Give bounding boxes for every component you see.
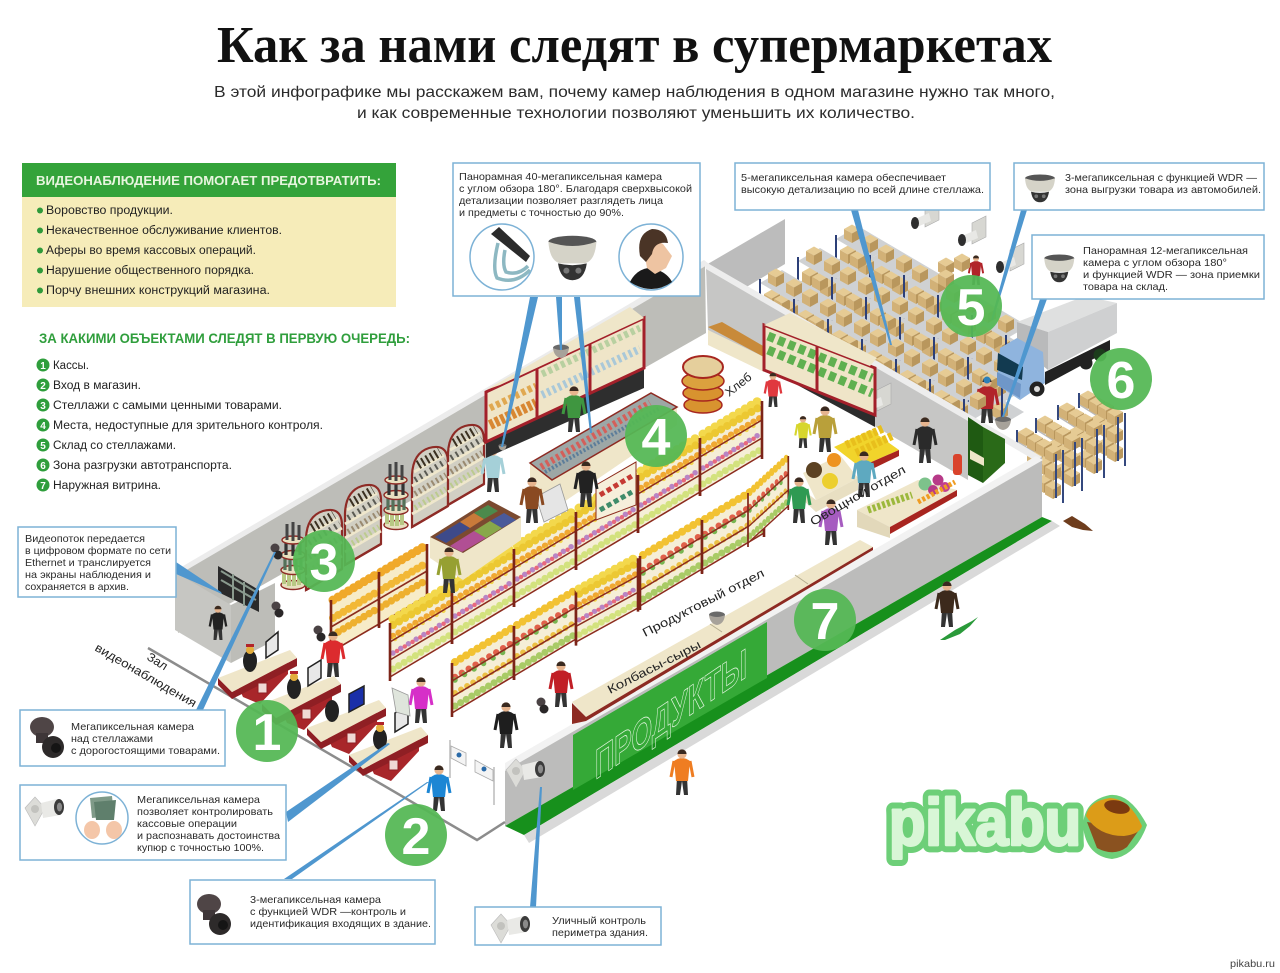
shopping cart — [392, 688, 410, 716]
number 7: 7 — [811, 593, 839, 651]
callout: entrance camera: с функцией WDR —контроль и — [250, 906, 406, 918]
vegetable cooler — [764, 313, 877, 427]
priority items: Места, недоступные для зрительного контроля. — [53, 420, 323, 432]
icon: mushroom camera — [30, 717, 64, 758]
front inner counter — [572, 540, 873, 724]
callout: video stream: Ethernet и транслируется — [25, 557, 151, 569]
logo wordmark: pikabu — [889, 785, 1081, 859]
cashiers — [243, 650, 387, 750]
number 1: 1 — [253, 704, 281, 762]
back wall of store — [178, 260, 709, 633]
prevention items: Воровство продукции. — [46, 205, 173, 217]
monitor wall — [218, 566, 259, 612]
store sign — [573, 622, 767, 790]
priority number markers — [36, 358, 50, 492]
department labels: Колбасы-сыры — [605, 637, 703, 697]
callout: 5 megapixel camera: 5-мегапиксельная камера обеспечивает — [741, 172, 946, 184]
warehouse racks — [760, 224, 1028, 447]
department labels: Хлеб — [722, 370, 755, 399]
number 3 — [293, 530, 355, 592]
sign lettering: ПРОДУКТЫ — [595, 639, 747, 789]
outside shoppers — [671, 581, 958, 795]
store shelves: long row one — [390, 400, 762, 681]
customers at fruit — [788, 451, 875, 545]
store shelves: long row two — [452, 456, 788, 717]
callout: camera above shelves: Мегапиксельная камера — [71, 721, 194, 733]
priority heading: ЗА КАКИМИ ОБЪЕКТАМИ СЛЕДЯТ В ПЕРВУЮ ОЧЕРЕДЬ: — [39, 331, 410, 346]
callout: outdoor perimeter: Уличный контроль — [552, 915, 647, 927]
truck cargo box — [1017, 296, 1117, 332]
icon: banknotes in circle — [76, 792, 128, 844]
callout: 12 megapixel camera: Панорамная 12-мегапиксельная — [1083, 245, 1248, 257]
department labels — [605, 370, 908, 697]
callout: video stream: Видеопоток передается — [25, 533, 145, 545]
number 5: 5 — [957, 279, 985, 337]
monitors — [266, 632, 278, 658]
icon: dome — [1044, 254, 1074, 282]
bottle arches — [281, 425, 484, 590]
truck wheels — [1030, 382, 1044, 396]
shopper with cart — [521, 477, 568, 523]
callout: cash control camera: Мегапиксельная камера — [137, 794, 260, 806]
prevention items: Порчу внешних конструкций магазина. — [46, 285, 270, 297]
callout: cash control camera: купюр с точностью 100%. — [137, 842, 264, 854]
callout: outdoor perimeter: периметра здания. — [552, 927, 648, 939]
prevention heading: ВИДЕОНАБЛЮДЕНИЕ ПОМОГАЕТ ПРЕДОТВРАТИТЬ: — [36, 173, 381, 188]
priority number markers: 3 — [40, 401, 46, 412]
warehouse door — [968, 417, 1005, 483]
surveillance room floor line — [148, 648, 505, 840]
callout: video stream — [18, 527, 176, 597]
callout: 12 megapixel camera: камера с углом обзора 180° — [1083, 257, 1227, 269]
callout: 12 megapixel camera: товара на склад. — [1083, 281, 1168, 293]
truck — [997, 296, 1117, 400]
callout: 3 megapixel WDR camera: 3-мегапиксельная с функцией WDR — — [1065, 172, 1257, 184]
prevention items: Аферы во время кассовых операций. — [46, 245, 256, 257]
title: Как за нами следят в супермаркетах — [217, 17, 1052, 74]
number 6: 6 — [1107, 352, 1135, 410]
outdoor rack by zone 6 — [1017, 390, 1125, 503]
customers near vegetable cooler — [765, 373, 836, 452]
department labels: Овощной отдел — [808, 462, 908, 529]
callout: video stream: сохраняется в архив. — [25, 581, 129, 593]
number 6 — [1090, 348, 1152, 410]
icon: bottle in circle — [470, 224, 534, 290]
callout: cash control camera: и распознавать достоинства — [137, 830, 280, 842]
number 5 — [940, 275, 1002, 337]
callout: 12 megapixel camera — [1032, 235, 1264, 299]
shop assistant — [575, 461, 597, 507]
callout: video stream: на экраны наблюдения и — [25, 569, 151, 581]
cooler with pastries — [486, 307, 644, 458]
callout: cash control camera: позволяет контролировать — [137, 806, 274, 818]
woman at cooler — [563, 386, 585, 432]
worker with box — [970, 376, 998, 423]
brown animal — [1063, 516, 1093, 531]
logo wordmark: pikabu — [889, 785, 1081, 859]
clothes island — [430, 500, 521, 580]
panel: priority objects — [36, 331, 410, 492]
number 4 — [625, 405, 687, 467]
subtitle — [214, 84, 1055, 122]
truck cab — [997, 338, 1045, 400]
olive shopper — [438, 547, 460, 593]
partition wall cameras — [808, 339, 891, 413]
priority items: Зона разгрузки автотранспорта. — [53, 460, 232, 472]
fruit stands — [803, 428, 957, 538]
crocodile toy — [940, 617, 978, 640]
truck chassis — [1045, 340, 1110, 385]
number 1 — [236, 700, 298, 762]
callout: entrance camera — [190, 880, 435, 944]
number 2 — [385, 804, 447, 866]
prevention items: Некачественное обслуживание клиентов. — [46, 225, 282, 237]
turnstiles — [450, 740, 494, 805]
fish counter — [530, 393, 677, 510]
icon: bullet camera — [25, 797, 64, 826]
small cameras in store — [270, 344, 1011, 714]
banana stand — [834, 430, 899, 467]
department labels: Продуктовый отдел — [640, 566, 767, 640]
prevention bullets — [37, 208, 43, 294]
warehouse worker — [969, 255, 983, 285]
icon: face in circle — [619, 224, 683, 290]
priority number markers: 7 — [40, 481, 46, 492]
callout: 3 megapixel WDR camera: зона выгрузки товара из автомобилей. — [1065, 184, 1261, 196]
priority number markers: 2 — [40, 381, 46, 392]
curb — [524, 521, 1060, 843]
subtitle: В этой инфографике мы расскажем вам, почему камер наблюдения в одном магазине нужно так много, — [214, 84, 1055, 101]
callout: entrance camera: 3-мегапиксельная камера — [250, 894, 381, 906]
callout: 40 megapixel camera: Панорамная 40-мегапиксельная камера — [459, 171, 662, 183]
plates display — [596, 462, 636, 520]
icon: bullet camera — [491, 914, 530, 943]
blue leader lines — [176, 210, 1047, 907]
number 3: 3 — [310, 534, 338, 592]
icon: dome camera — [548, 236, 596, 280]
subtitle: и как современные технологии позволяют уменьшить их количество. — [357, 105, 915, 122]
shoppers front hall — [322, 631, 572, 811]
boxes carried by worker — [938, 254, 970, 288]
front outer wall — [505, 456, 1060, 843]
callout: outdoor perimeter — [475, 907, 661, 945]
callout: 40 megapixel camera — [453, 163, 700, 296]
number 4: 4 — [642, 409, 671, 467]
security guard — [914, 417, 936, 463]
priority items: Наружная витрина. — [53, 480, 161, 492]
callout: video stream: в цифровом формате по сети — [25, 545, 171, 557]
ground strip — [505, 517, 1052, 835]
priority number markers: 6 — [40, 461, 46, 472]
store shelves: oranges by zone 3 — [331, 544, 427, 656]
pikabu logo — [889, 785, 1147, 859]
prevention items: Нарушение общественного порядка. — [46, 265, 254, 277]
priority number markers: 4 — [40, 421, 46, 432]
priority items — [53, 360, 323, 492]
icon: mushroom camera — [197, 894, 231, 935]
priority items: Кассы. — [53, 360, 89, 372]
checkout counters — [218, 632, 428, 781]
surveillance room label: Зал — [144, 650, 170, 673]
bread rack — [682, 356, 724, 413]
priority items: Стеллажи с самыми ценными товарами. — [53, 400, 282, 412]
bread counter — [708, 322, 770, 372]
wall-mounted warehouse cameras — [911, 199, 1024, 273]
operator — [210, 606, 226, 640]
callout: 40 megapixel camera: и предметы с точностью до 90%. — [459, 207, 624, 219]
callout: 12 megapixel camera: и функцией WDR — зона приемки — [1083, 269, 1260, 281]
surveillance room label: видеонаблюдения — [92, 640, 199, 710]
callout: 40 megapixel camera: детализации позволяет разглядеть лица — [459, 195, 663, 207]
monitoring room — [175, 566, 275, 663]
partition wall — [704, 261, 1042, 480]
callout: camera above shelves — [20, 710, 225, 766]
outdoor bullet camera — [506, 759, 545, 788]
callout: 5 megapixel camera — [735, 163, 990, 210]
panel: prevention list — [22, 163, 396, 307]
callout: camera above shelves: над стеллажами — [71, 733, 153, 745]
priority items: Склад со стеллажами. — [53, 440, 176, 452]
warehouse back wall — [706, 219, 785, 310]
number markers — [236, 275, 1152, 866]
callout: camera above shelves: с дорогостоящими товарами. — [71, 745, 220, 757]
callout: cash control camera: кассовые операции — [137, 818, 237, 830]
callout: 5 megapixel camera: высокую детализацию по всей длине стеллажа. — [741, 184, 984, 196]
callout: 3 megapixel WDR camera — [1014, 163, 1264, 210]
watermark: pikabu.ru — [1230, 958, 1275, 970]
callout: cash control camera — [20, 785, 286, 860]
callout: 40 megapixel camera: с углом обзора 180°. Благодаря сверхвысокой — [459, 183, 692, 195]
prevention items — [46, 205, 282, 297]
robot shopper — [482, 446, 504, 492]
callout: entrance camera: идентификация входящих в здание. — [250, 918, 431, 930]
number 2: 2 — [402, 808, 430, 866]
monitoring partition — [231, 583, 275, 663]
vegetable stand — [857, 480, 957, 527]
logo muffin — [1083, 795, 1147, 859]
mixed fruit stand — [803, 455, 858, 500]
priority number markers: 1 — [40, 361, 46, 372]
priority items: Вход в магазин. — [53, 380, 141, 392]
priority number markers: 5 — [40, 441, 46, 452]
number 7 — [794, 589, 856, 651]
icon: dome — [1025, 174, 1055, 202]
fire extinguisher — [953, 454, 962, 475]
